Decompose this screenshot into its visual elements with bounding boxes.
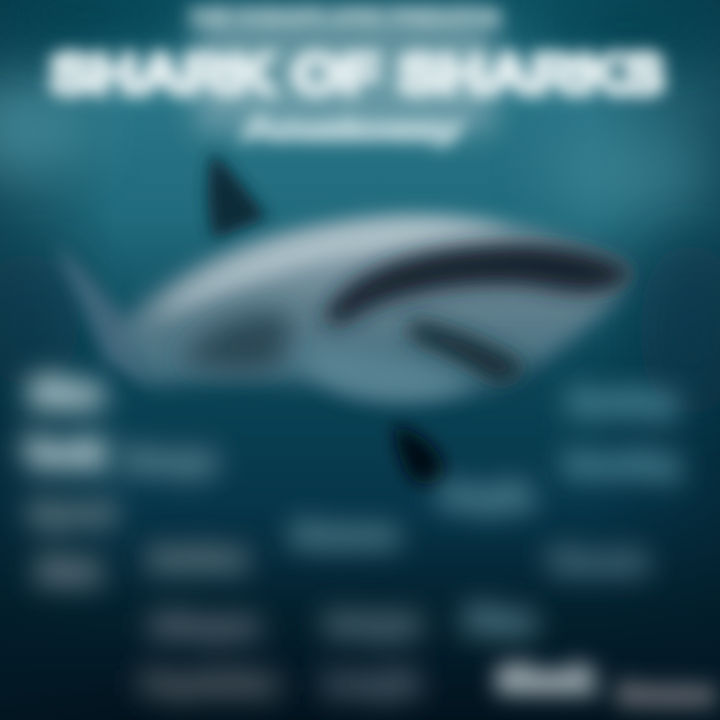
labels: left column xyxy=(25,372,114,589)
label: centre 2: Weight xyxy=(326,609,418,640)
subtitle: Anatomy xyxy=(242,112,463,145)
label: left 1: Size xyxy=(30,372,102,413)
flank shadow xyxy=(180,314,290,372)
label: centre 3: Length xyxy=(325,667,419,698)
label: right 2: Breeding xyxy=(566,449,678,479)
dorsal fin xyxy=(208,152,268,240)
head dark band xyxy=(325,243,635,324)
label: left 3: Speed xyxy=(30,497,114,528)
label: left 4: Diet xyxy=(38,553,99,589)
pectoral fin xyxy=(395,425,445,485)
label: column 2 item 3: Lifespan xyxy=(152,610,258,640)
label: column 2 item 2: Habitat xyxy=(150,543,244,574)
title block xyxy=(50,8,664,145)
badge: logo mark: Shark xyxy=(498,661,592,699)
tail fin xyxy=(55,245,150,385)
overline: THE OCEAN'S APEX PREDATOR xyxy=(190,8,501,30)
shark body xyxy=(120,217,632,399)
bottom badges xyxy=(498,661,713,709)
belly highlight xyxy=(300,349,470,401)
label: right 1: Hunting xyxy=(569,386,675,417)
upper back highlight xyxy=(150,221,510,320)
badge: source: Source xyxy=(619,678,713,709)
label: left 2: Teeth xyxy=(25,435,107,471)
labels: centre columns xyxy=(292,478,535,698)
label: column 2 item 1: Range xyxy=(124,444,216,477)
shark illustration xyxy=(55,152,635,485)
main title: SHARK OF SHARKS xyxy=(50,42,664,105)
labels: right column xyxy=(549,386,678,576)
labels: second column xyxy=(124,444,277,698)
label: centre-right 2: Fins xyxy=(465,602,535,640)
label: right 3: Threats xyxy=(549,546,647,576)
title glow panel xyxy=(195,8,495,133)
label: column 2 item 4: Population xyxy=(143,668,277,698)
label: centre-right 1: Depth xyxy=(442,478,532,514)
mouth stripe xyxy=(410,320,530,386)
label: centre 1: Senses xyxy=(292,518,398,551)
